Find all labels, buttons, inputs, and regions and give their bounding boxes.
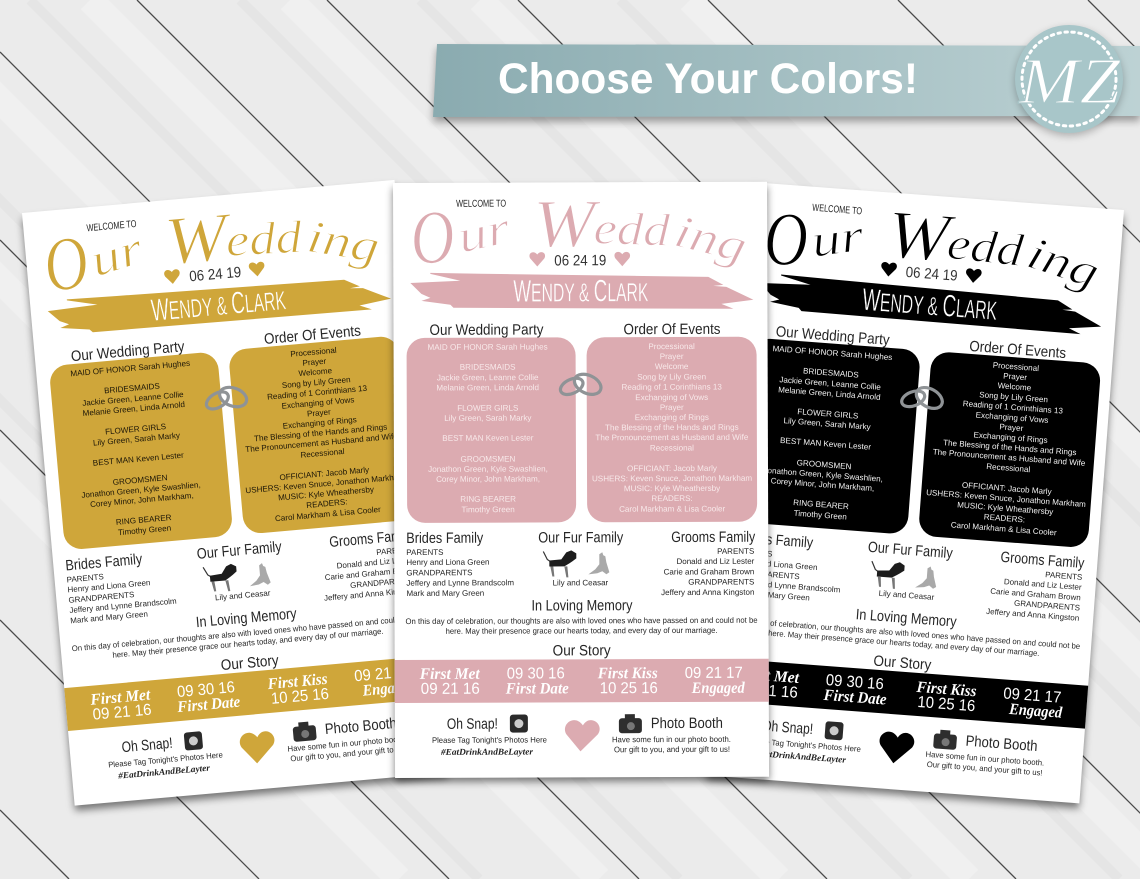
title: our wedding: ing	[304, 211, 383, 272]
panel: order of events list: Processional	[648, 342, 695, 351]
timeline bar: our story: First Met	[89, 687, 151, 709]
welcome label: WELCOME TO	[86, 219, 137, 234]
fur family: Our Fur Family	[196, 538, 283, 563]
brides family	[732, 529, 845, 605]
panel: order of events list: Recessional	[650, 443, 694, 453]
panel: wedding party list: Jonathon Green, Kyle Swashlien,	[428, 464, 548, 474]
brides family: PARENTS	[66, 572, 104, 584]
timeline bar: our story: Engaged	[1008, 701, 1064, 722]
title: our wedding: ing	[1021, 227, 1106, 298]
icon: camera	[619, 714, 642, 733]
panel: order of events list: USHERS: Keven Snuce, Jonathon Markham	[245, 472, 406, 495]
panel: order of events list: READERS:	[984, 512, 1025, 524]
title: our wedding	[757, 186, 1109, 308]
in loving memory: In Loving Memory	[855, 606, 958, 631]
grooms family: Grooms Family	[1000, 549, 1085, 572]
panel: order of events list: Prayer	[307, 407, 331, 419]
title: our wedding	[35, 184, 388, 310]
panel: wedding party list: RING BEARER	[460, 495, 516, 504]
fur family	[538, 529, 624, 587]
banner heading: Choose Your Colors!	[498, 55, 918, 103]
grooms family: Jeffery and Anna Kingston	[661, 588, 754, 597]
brides family: PARENTS	[735, 547, 773, 559]
panel: gold card	[22, 180, 448, 811]
panel: wedding party list: Jackie Green, Leanne Collie	[437, 373, 539, 382]
brides family	[406, 530, 514, 598]
brides family: Henry and Liona Green	[67, 578, 151, 594]
timeline bar: our story: 09 30 16	[825, 672, 884, 693]
timeline bar: our story: First Kiss	[915, 679, 977, 700]
panel: wedding party list: Melanie Green, Linda Arnold	[778, 385, 881, 402]
panel: wedding party list: FLOWER GIRLS	[105, 422, 167, 436]
oh snap block: #EatDrinkAndBeLayter	[117, 763, 211, 781]
timeline bar: our story: Engaged	[361, 678, 417, 700]
panel: wedding party list: BEST MAN Keven Lester	[780, 436, 872, 452]
title: our wedding: W	[533, 185, 601, 262]
panel: wedding party list: RING BEARER	[115, 513, 172, 527]
photo booth block: Have some fun in our photo booth.	[925, 750, 1045, 768]
brides family: Jeffery and Lynne Brandscolm	[406, 578, 514, 588]
panel: wedding party list: FLOWER GIRLS	[797, 407, 859, 421]
heading: wedding party: Our Wedding Party	[429, 321, 544, 339]
timeline bar: our story: First Met	[419, 666, 480, 683]
grooms family: Donald and Liz Lester	[1004, 577, 1082, 592]
timeline bar: our story: First Date	[822, 687, 887, 709]
title: our wedding: O	[36, 219, 96, 310]
timeline bar: our story: First Date	[505, 680, 569, 698]
grooms family: PARENTS	[376, 545, 414, 557]
grooms family	[318, 527, 419, 603]
brides family: Brides Family	[65, 551, 143, 575]
title: our wedding: edd	[945, 217, 1027, 276]
in loving memory: On this day of celebration, our thoughts are also with loved ones who have passed on and could not be	[406, 616, 758, 626]
timeline bar: our story: 09 21 16	[738, 681, 799, 702]
panel: order of events list: Carol Markham & Lisa Cooler	[275, 505, 381, 523]
in loving memory	[405, 597, 758, 636]
in loving memory: here. May their presence grace our hearts today, and every day of our marriage.	[768, 629, 1040, 658]
timeline bar: our story: 10 25 16	[917, 694, 976, 715]
panel: order of events list: MUSIC: Kyle Wheathersby	[624, 484, 721, 493]
panel: wedding party list: GROOMSMEN	[461, 455, 516, 464]
timeline bar: our story: 09 30 16	[507, 665, 565, 683]
panel: order of events list: OFFICIANT: Jacob Marly	[962, 481, 1053, 496]
panel: order of events list: Welcome	[655, 362, 689, 371]
brides family: Henry and Liona Green	[734, 557, 818, 572]
oh snap block	[106, 729, 225, 781]
panel: wedding party list: Lily Green, Sarah Marky	[444, 414, 532, 423]
brides family: Jeffery and Lynne Brandscolm	[733, 577, 841, 595]
brides family: Mark and Mary Green	[70, 609, 148, 625]
panel: order of events list: The Pronouncement as Husband and Wife	[595, 433, 749, 442]
icon: instagram	[184, 731, 203, 751]
grooms family: Donald and Liz Lester	[336, 555, 415, 571]
panel: order of events list: Reading of 1 Corinthians 13	[267, 384, 368, 402]
photo booth block: Photo Booth	[651, 715, 723, 732]
title: our wedding: O	[406, 194, 459, 282]
heading: our story: Our Story	[220, 652, 280, 674]
icon: cat	[248, 563, 271, 586]
panel: order of events list: Reading of 1 Corinthians 13	[962, 399, 1064, 416]
brush banner: names: WENDY & CLARK	[150, 281, 288, 328]
icon: camera	[292, 721, 317, 742]
fur family: Lily and Ceasar	[553, 578, 609, 587]
panel: order of events list: Prayer	[302, 357, 327, 368]
title: our wedding: edd	[593, 202, 672, 256]
grooms family: Jeffery and Anna Kingston	[986, 607, 1080, 623]
panel: order of events list: READERS:	[306, 497, 348, 510]
panel: wedding party list: GROOMSMEN	[796, 458, 852, 471]
timeline bar: our story: 09 21 17	[685, 665, 743, 682]
panel: wedding party list: Timothy Green	[462, 505, 515, 514]
photo booth block: Our gift to you, and your gift to us!	[290, 744, 406, 763]
panel: order of events list: Carol Markham & Lisa Cooler	[950, 520, 1057, 537]
panel: wedding party list: Jackie Green, Leanne Collie	[779, 375, 882, 392]
timeline bar: our story: 09 21 16	[421, 681, 480, 698]
brides family: GRANDPARENTS	[733, 567, 800, 581]
welcome label: WELCOME TO	[456, 199, 506, 210]
panel: order of events list: Prayer	[660, 352, 684, 361]
timeline bar: our story: 10 25 16	[600, 680, 658, 697]
fur family	[196, 538, 286, 604]
panel: wedding party list: Lily Green, Sarah Marky	[93, 431, 181, 448]
date with hearts: 06 24 19	[905, 264, 958, 285]
panel: wedding party list: Melanie Green, Linda Arnold	[436, 383, 539, 392]
oh snap block	[745, 715, 863, 766]
panel: order of events list: Exchanging of Rings	[282, 415, 357, 431]
fur family: Lily and Ceasar	[878, 589, 935, 602]
panel: wedding party list: MAID OF HONOR Sarah Hughes	[428, 342, 548, 352]
timeline bar: our story: First Kiss	[597, 665, 658, 682]
photo booth block: Have some fun in our photo booth.	[287, 734, 406, 754]
oh snap block: Oh Snap!	[447, 716, 498, 733]
timeline bar: our story: 10 25 16	[270, 686, 330, 708]
grooms family: PARENTS	[1045, 570, 1083, 582]
panel: wedding party list: Corey Minor, John Markham,	[436, 474, 540, 484]
panel: order of events list: READERS:	[651, 494, 693, 503]
photo booth block	[285, 713, 407, 764]
panel: order of events list: Song by Lily Green	[281, 375, 351, 390]
panel: order of events list: The Pronouncement as Husband and Wife	[245, 432, 399, 454]
panel: order of events list: USHERS: Keven Snuce, Jonathon Markham	[592, 474, 752, 483]
timeline bar: our story: 09 21 17	[354, 663, 413, 685]
panel: order of events list: Carol Markham & Lisa Cooler	[619, 504, 726, 514]
brides family: GRANDPARENTS	[68, 590, 135, 605]
grooms family: Donald and Liz Lester	[676, 557, 755, 566]
oh snap block: Oh Snap!	[121, 735, 173, 756]
timeline bar: our story: First Kiss	[266, 671, 328, 693]
icon: heart	[565, 720, 600, 751]
panel: order of events list	[228, 335, 414, 535]
banner: choose your colors	[433, 44, 1140, 122]
brides family: PARENTS	[406, 548, 444, 557]
panel: order of events list: Exchanging of Rings	[635, 413, 709, 422]
panel: wedding party list: BEST MAN Keven Lester	[442, 434, 534, 443]
panel: wedding party list: GROOMSMEN	[112, 473, 168, 487]
title: our wedding: ur	[84, 222, 150, 286]
panel: order of events list: Exchanging of Vows	[281, 395, 355, 411]
panel: wedding party list: Jonathon Green, Kyle Swashlien,	[763, 466, 883, 484]
heading: our story: Our Story	[553, 642, 611, 659]
icon: dog	[870, 560, 905, 590]
oh snap block	[432, 714, 548, 757]
brides family: Mark and Mary Green	[406, 589, 484, 598]
grooms family: PARENTS	[717, 547, 754, 556]
panel: wedding party list: Corey Minor, John Markham,	[770, 476, 875, 493]
grooms family: Carie and Graham Brown	[324, 565, 416, 582]
icon: dog	[543, 550, 576, 577]
icon: wedding rings	[899, 382, 947, 413]
grooms family: GRANDPARENTS	[688, 577, 754, 587]
panel: order of events list: MUSIC: Kyle Wheathersby	[278, 485, 375, 502]
fur family: Lily and Ceasar	[215, 588, 271, 602]
brides family: Mark and Mary Green	[732, 588, 810, 603]
panel: wedding party list: BRIDESMAIDS	[803, 366, 860, 380]
brides family: Jeffery and Lynne Brandscolm	[69, 597, 177, 615]
brush banner: names: WENDY & CLARK	[861, 282, 999, 327]
timeline bar: our story: 09 30 16	[176, 679, 236, 701]
title: our wedding	[406, 185, 752, 282]
timeline bar: our story: First Date	[176, 694, 241, 716]
icon: cat	[915, 566, 938, 589]
panel: order of events list: The Blessing of the Hands and Rings	[605, 423, 739, 432]
date with hearts: 06 24 19	[554, 252, 606, 269]
panel: order of events list: Processional	[992, 361, 1040, 373]
brush banner: names	[47, 271, 392, 338]
panel: wedding party list: Corey Minor, John Markham,	[90, 491, 194, 509]
panel: order of events list: The Pronouncement as Husband and Wife	[932, 447, 1086, 468]
panel: wedding party list: MAID OF HONOR Sarah Hughes	[772, 344, 893, 362]
oh snap block: Oh Snap!	[762, 717, 814, 738]
brides family: Brides Family	[736, 529, 814, 552]
panel: order of events list: Welcome	[997, 381, 1032, 393]
panel: order of events list: Prayer	[660, 403, 684, 412]
panel: order of events list: Prayer	[999, 422, 1024, 433]
panel: order of events list: Welcome	[298, 366, 333, 378]
photo booth block: Have some fun in our photo booth.	[612, 735, 731, 744]
photo booth block: Photo Booth	[324, 715, 397, 738]
icon: cat	[588, 552, 609, 574]
icon: dog	[203, 563, 238, 593]
timeline bar: our story: 09 21 16	[92, 702, 152, 724]
panel: order of events list: Exchanging of Rings	[973, 430, 1048, 445]
welcome label: WELCOME TO	[812, 203, 863, 217]
in loving memory: On this day of celebration, our thoughts are also with loved ones who have passed on and could not be	[729, 616, 1081, 651]
panel: wedding party list: Jonathon Green, Kyle Swashlien,	[81, 480, 201, 500]
oh snap block: Please Tag Tonight's Photos Here	[746, 736, 862, 754]
panel: wedding party list: Melanie Green, Linda Arnold	[82, 400, 185, 418]
panel: wedding party list: Timothy Green	[118, 524, 171, 537]
heading: order of events: Order Of Events	[263, 322, 362, 348]
grooms family: Carie and Graham Brown	[990, 587, 1081, 602]
panel: wedding party list: RING BEARER	[793, 498, 849, 511]
oh snap block: #EatDrinkAndBeLayter	[440, 747, 534, 757]
icon: wedding rings	[202, 382, 251, 414]
oh snap block: #EatDrinkAndBeLayter	[753, 748, 847, 765]
panel: order of events list: Exchanging of Vows	[635, 393, 708, 402]
panel: order of events list: OFFICIANT: Jacob Marly	[627, 464, 718, 473]
timeline bar: our story: First Met	[737, 665, 800, 687]
panel: order of events list	[587, 337, 757, 522]
photo booth block	[925, 729, 1046, 778]
panel: pink card	[393, 182, 769, 782]
grooms family	[986, 548, 1085, 623]
icon: camera	[933, 729, 957, 750]
in loving memory	[70, 594, 424, 663]
panel: order of events list: Recessional	[300, 447, 345, 460]
title: our wedding: ing	[670, 205, 752, 272]
panel: order of events list: Song by Lily Green	[637, 372, 706, 382]
oh snap block: Please Tag Tonight's Photos Here	[432, 735, 547, 745]
date with hearts	[164, 261, 266, 288]
title: our wedding: edd	[224, 211, 304, 266]
panel: order of events list	[918, 351, 1101, 548]
panel: wedding party list	[49, 351, 233, 551]
panel: order of events list: Recessional	[986, 462, 1031, 474]
brides family	[65, 548, 178, 625]
panel: wedding party list: BEST MAN Keven Lester	[92, 451, 184, 468]
timeline bar: our story	[64, 655, 441, 731]
brush banner: names	[410, 272, 753, 310]
date with hearts: 06 24 19	[189, 264, 242, 285]
timeline bar: our story: Engaged	[691, 680, 746, 697]
in loving memory	[728, 597, 1082, 661]
grooms family: GRANDPARENTS	[1014, 599, 1080, 613]
icon: instagram	[510, 715, 528, 733]
fur family: Our Fur Family	[867, 539, 954, 562]
brides family: Henry and Liona Green	[406, 558, 490, 567]
panel: wedding party list: BRIDESMAIDS	[460, 363, 516, 372]
panel: wedding party list: BRIDESMAIDS	[104, 381, 161, 395]
icon: instagram	[824, 721, 844, 740]
grooms family: Carie and Graham Brown	[664, 567, 754, 577]
panel: order of events list: The Blessing of the Hands and Rings	[254, 423, 388, 443]
title: our wedding: W	[162, 198, 236, 279]
brides family: GRANDPARENTS	[406, 568, 472, 577]
photo booth block: Our gift to you, and your gift to us!	[614, 745, 730, 754]
photo booth block: Photo Booth	[965, 733, 1038, 755]
panel: order of events list: Processional	[290, 346, 337, 359]
in loving memory: In Loving Memory	[531, 597, 633, 615]
timeline bar: our story: 09 21 17	[1003, 685, 1062, 707]
brush banner: names: WENDY & CLARK	[513, 273, 649, 309]
brush banner: names	[758, 273, 1103, 336]
title: our wedding: ur	[808, 209, 868, 267]
panel: wedding party list: MAID OF HONOR Sarah Hughes	[70, 359, 190, 378]
oh snap block: Please Tag Tonight's Photos Here	[108, 750, 224, 770]
photo booth block	[612, 714, 731, 754]
date with hearts	[880, 262, 982, 287]
panel: order of events list: Prayer	[1003, 371, 1028, 382]
title: our wedding: W	[885, 195, 958, 276]
fur family	[864, 539, 954, 603]
panel: wedding party list: Timothy Green	[793, 509, 847, 522]
title: our wedding: ur	[453, 201, 516, 263]
grooms family: Grooms Family	[329, 527, 414, 551]
heading: wedding party: Our Wedding Party	[70, 338, 186, 365]
panel: order of events list: The Blessing of the Hands and Rings	[943, 438, 1077, 457]
logo badge: MZ	[1015, 25, 1123, 136]
panel: wedding party list	[738, 338, 921, 535]
date with hearts	[529, 252, 630, 270]
in loving memory: In Loving Memory	[195, 605, 298, 631]
panel: order of events list: OFFICIANT: Jacob Marly	[279, 465, 370, 482]
brides family: Brides Family	[406, 530, 484, 547]
icon: wedding rings	[558, 370, 604, 398]
timeline bar: our story	[712, 658, 1088, 729]
in loving memory: here. May their presence grace our hearts today, and every day of our marriage.	[112, 627, 384, 660]
grooms family	[661, 529, 756, 597]
icon: heart	[239, 731, 276, 765]
grooms family: Jeffery and Anna Kingston	[324, 586, 417, 603]
heading: order of events: Order Of Events	[969, 338, 1067, 362]
logo badge: MZ: MZ	[1018, 45, 1121, 118]
panel: order of events list: Exchanging of Vows	[975, 411, 1049, 425]
panel: wedding party list: Jackie Green, Leanne Collie	[82, 390, 184, 408]
panel: wedding party list: Lily Green, Sarah Marky	[783, 416, 872, 432]
timeline bar: our story	[395, 659, 769, 703]
panel: wedding party list: FLOWER GIRLS	[457, 404, 519, 413]
panel: wedding party list	[407, 337, 576, 523]
panel: black card	[706, 182, 1124, 808]
photo booth block: Our gift to you, and your gift to us!	[926, 760, 1043, 778]
heading: order of events: Order Of Events	[623, 321, 721, 338]
heading: our story: Our Story	[873, 653, 932, 674]
icon: heart	[878, 731, 915, 765]
grooms family: GRANDPARENTS	[350, 575, 416, 590]
panel: order of events list: USHERS: Keven Snuce, Jonathon Markham	[926, 488, 1086, 509]
panel: order of events list: Song by Lily Green	[979, 390, 1048, 404]
panel: order of events list: MUSIC: Kyle Wheathersby	[957, 500, 1055, 517]
in loving memory: On this day of celebration, our thoughts are also with loved ones who have passed on and could not be	[71, 613, 423, 653]
panel: order of events list: Reading of 1 Corinthians 13	[622, 382, 722, 392]
grooms family: Grooms Family	[671, 529, 756, 546]
title: our wedding: O	[763, 197, 809, 282]
heading: wedding party: Our Wedding Party	[775, 323, 891, 349]
fur family: Our Fur Family	[538, 529, 624, 546]
in loving memory: here. May their presence grace our hearts today, and every day of our marriage.	[446, 626, 718, 636]
